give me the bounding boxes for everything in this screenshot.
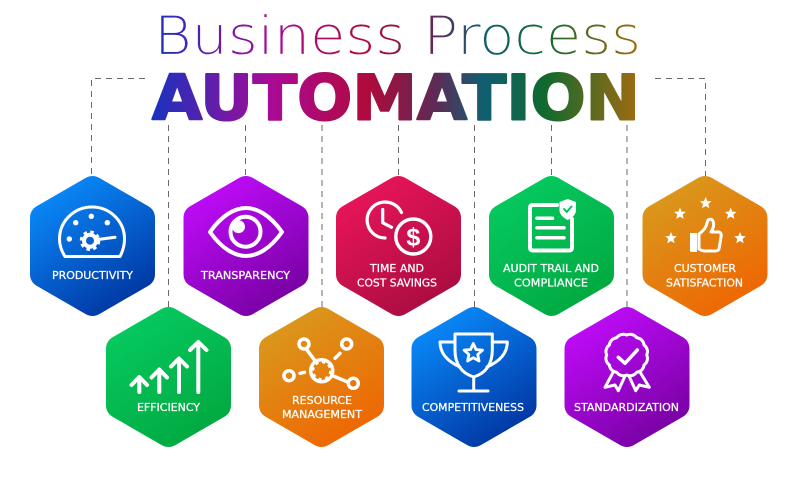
icon: document with shield xyxy=(530,199,576,250)
icon: rising arrows xyxy=(132,342,206,392)
title: Business Process: Business Process xyxy=(154,6,641,67)
label: TIME AND xyxy=(369,262,424,275)
label xyxy=(503,262,599,290)
label: COMPETITIVENESS xyxy=(422,401,524,414)
label: RESOURCE xyxy=(292,394,352,407)
panel: audit trail and compliance xyxy=(489,176,614,316)
label: TRANSPARENCY xyxy=(200,269,290,282)
panel: customer satisfaction xyxy=(642,176,768,316)
panel: transparency xyxy=(184,176,308,316)
icon: eye xyxy=(210,208,282,256)
label xyxy=(282,394,362,421)
icon: gauge xyxy=(60,207,124,256)
label: CUSTOMER xyxy=(674,262,737,275)
label: STANDARDIZATION xyxy=(574,401,679,414)
icon: network nodes xyxy=(284,339,358,388)
panel: standardization xyxy=(564,307,690,447)
label: SATISFACTION xyxy=(666,276,743,290)
dashed connector lines xyxy=(92,78,706,307)
panel: efficiency xyxy=(106,307,231,447)
icon: trophy xyxy=(440,334,507,391)
icon: award ribbon xyxy=(605,334,649,391)
panel: productivity xyxy=(30,176,155,316)
panel: time and cost savings xyxy=(336,176,461,316)
label xyxy=(666,262,743,290)
icon: clock and dollar: $ xyxy=(406,224,420,252)
label: MANAGEMENT xyxy=(282,408,362,421)
icon: thumbs up with stars xyxy=(665,197,746,252)
panel: competitiveness xyxy=(412,307,536,447)
label: COST SAVINGS xyxy=(357,276,437,290)
label xyxy=(357,262,437,290)
label: AUDIT TRAIL AND xyxy=(503,262,599,275)
panel: resource management xyxy=(259,307,384,447)
label: COMPLIANCE xyxy=(514,276,588,290)
label: EFFICIENCY xyxy=(137,401,200,414)
label: PRODUCTIVITY xyxy=(52,269,133,282)
title: AUTOMATION: AUTOMATION xyxy=(152,62,640,134)
